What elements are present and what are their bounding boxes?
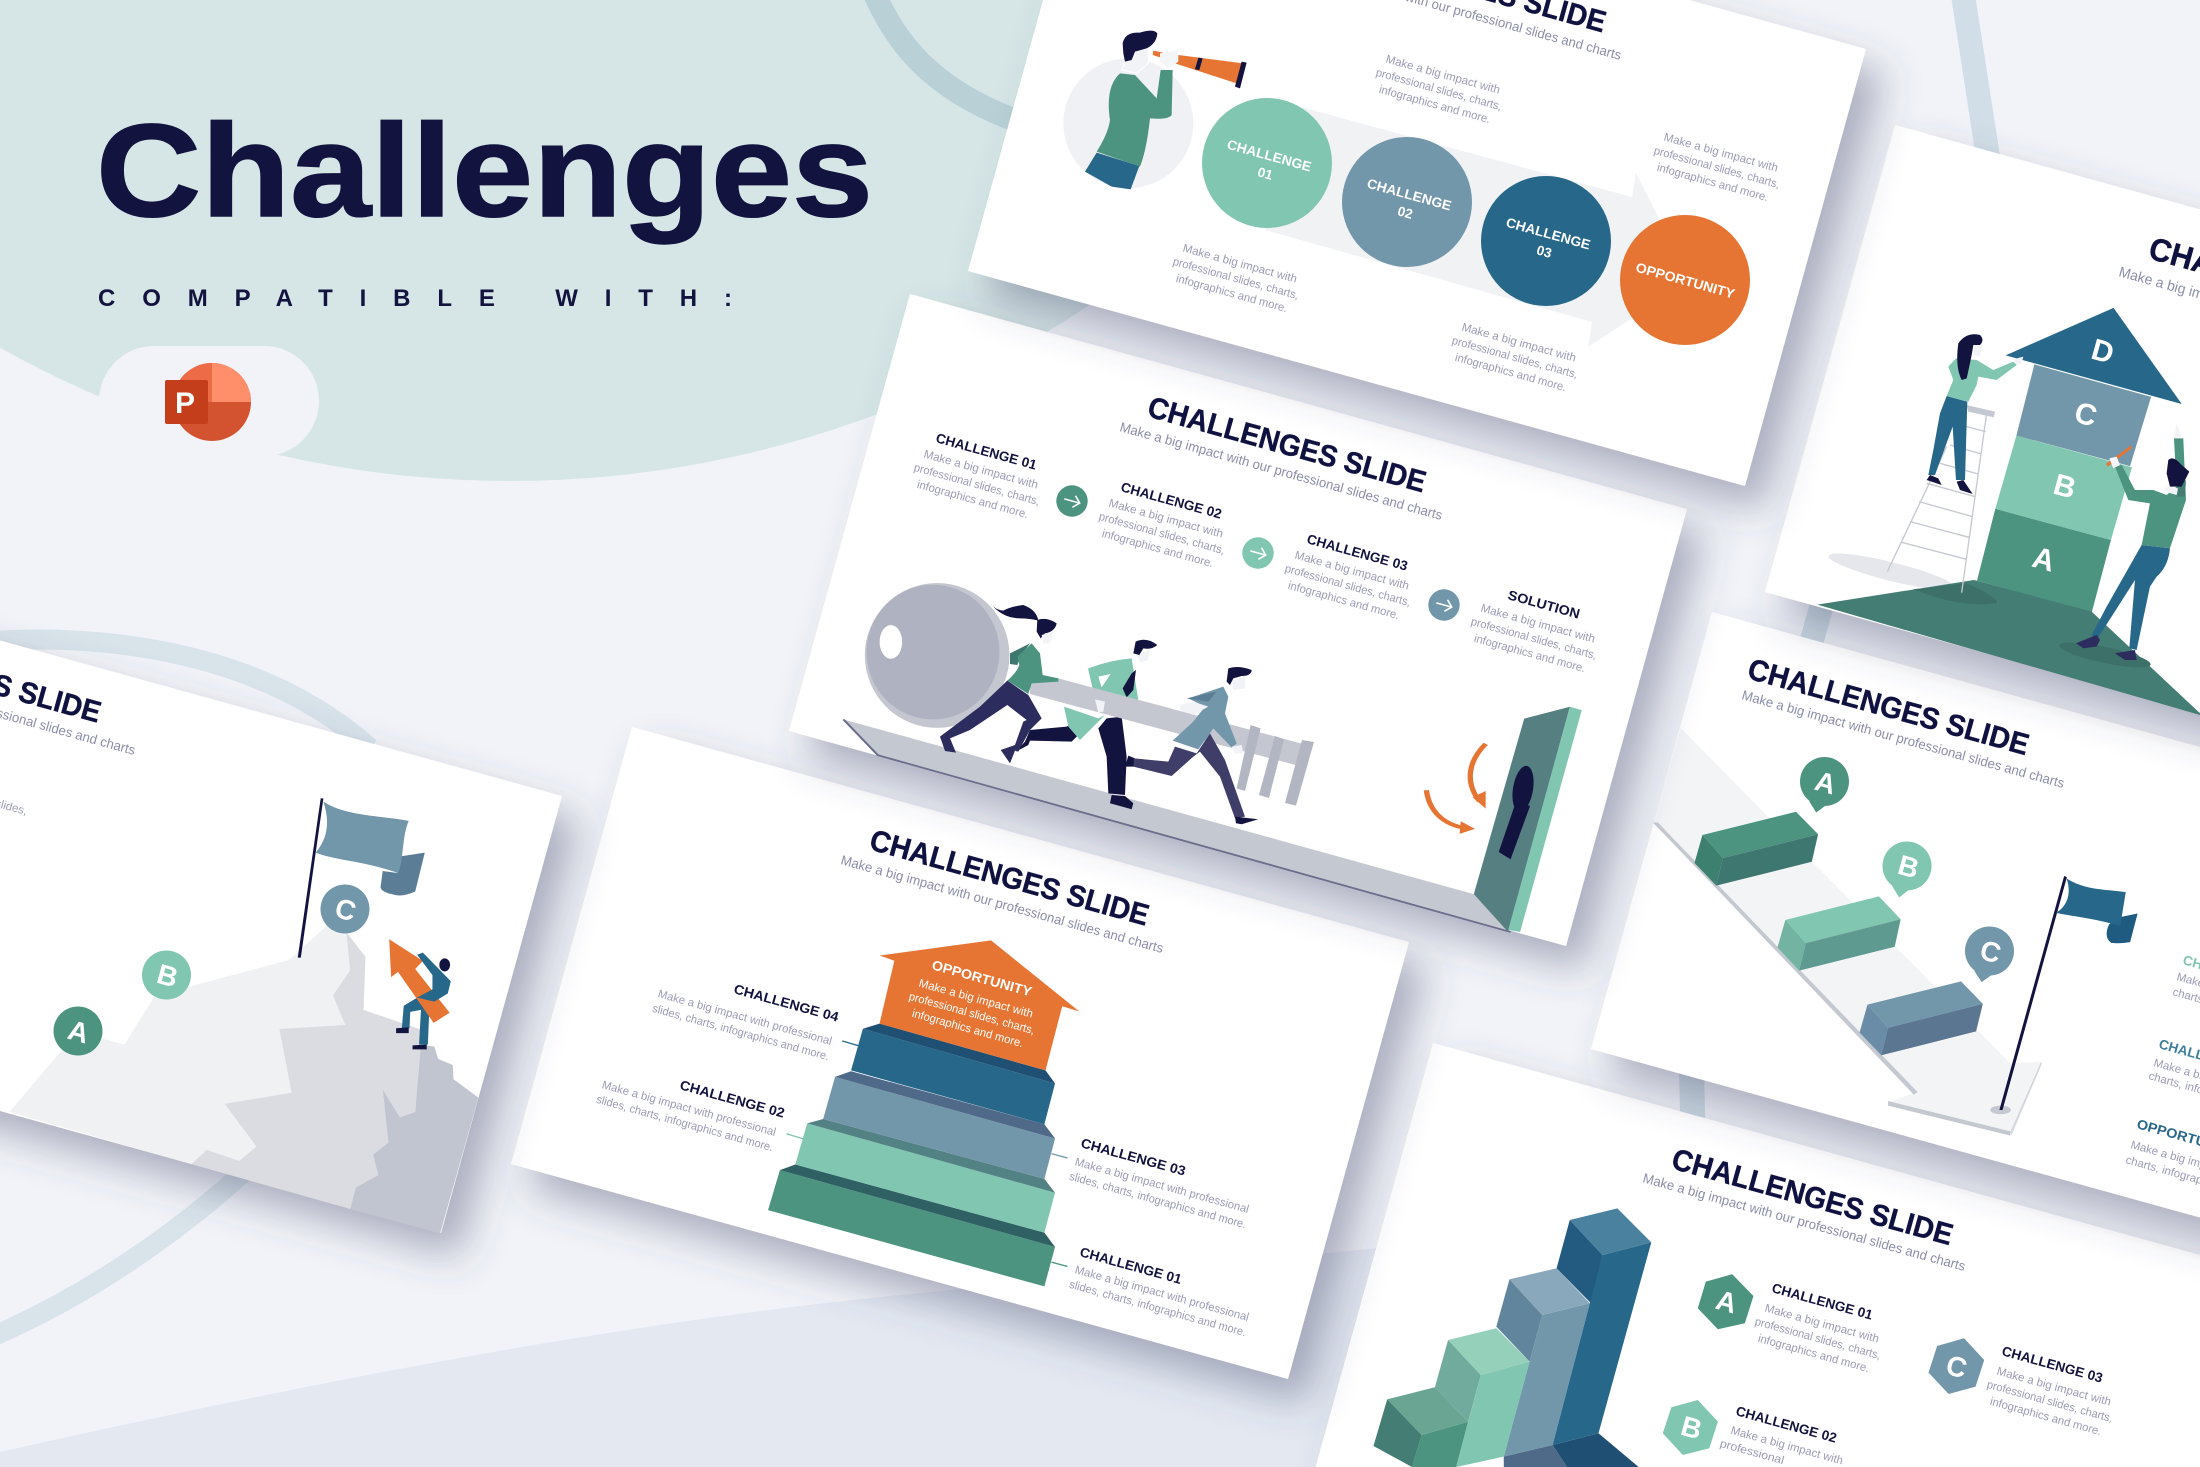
step: challenge 01: CHALLENGE 01 <box>934 430 1039 473</box>
step: solution: SOLUTION <box>1506 587 1582 622</box>
circle: challenge 01: 01 <box>1256 164 1275 183</box>
circle: challenge 01 <box>1202 98 1332 228</box>
circle: challenge 03: CHALLENGE <box>1504 215 1592 252</box>
illustration: floor <box>843 719 1511 932</box>
body text top: Make a big impact with <box>1384 54 1501 97</box>
pin B: B <box>1895 849 1922 884</box>
label: challenge 01: infographics and more. <box>1757 1333 1871 1375</box>
slide: mountain climb <box>0 581 562 1234</box>
step: challenge 01 <box>908 430 1045 523</box>
badge B: B <box>154 958 181 993</box>
label: challenge 02: CHALLENGE 02 <box>678 1077 786 1121</box>
label: challenge 01 <box>1068 1244 1252 1339</box>
chart: stepped pyramid <box>768 940 1079 1286</box>
step: solution: infographics and more. <box>1473 633 1587 675</box>
label: opportunity <box>903 957 1040 1052</box>
label: challenge 03: professional slides, charts, <box>1985 1379 2114 1425</box>
body text lower middle: Make a big impact with <box>1460 322 1577 365</box>
panel background <box>1591 612 2200 1264</box>
subheading: Make a big impact with our professional slides and charts <box>1641 1170 1967 1274</box>
arrows: orange rotation <box>1426 744 1486 834</box>
step: challenge 02: CHALLENGE 02 <box>1119 479 1223 522</box>
slide: steps and flag <box>1591 612 2200 1264</box>
label: challenge 03: Make a big impact with <box>1995 1366 2112 1409</box>
arrow: step 3 to solution <box>1425 586 1463 624</box>
background: teal ring <box>875 0 1020 122</box>
step: challenge 02: infographics and more. <box>1101 528 1215 570</box>
background: lower band <box>0 1248 1378 1467</box>
ground and shadows <box>1817 547 2200 715</box>
illustration: house blocks <box>1977 308 2182 612</box>
step: challenge 03 <box>1279 531 1416 624</box>
label: challenge 01: Make a big impact with <box>1763 1303 1880 1346</box>
label: opportunity: OPPORTUNITY <box>930 957 1033 999</box>
pin C <box>1965 926 2014 982</box>
step: solution: Make a big impact with <box>1479 603 1596 646</box>
body text right: infographics and more. <box>1656 162 1770 204</box>
illustration: man with telescope <box>1063 31 1247 189</box>
body text top <box>1370 52 1507 128</box>
heading: CHALLENGES SLIDE <box>866 824 1153 933</box>
background: ring mid right <box>1812 590 1826 640</box>
letter B: B <box>2050 468 2079 506</box>
label: challenge 03: CHALLENGE 03 <box>2000 1343 2105 1386</box>
subheading: Make a big impact with our professional slides and charts <box>1118 419 1444 523</box>
step: challenge 01: Make a big impact with <box>922 449 1039 492</box>
badge A: A <box>65 1014 92 1049</box>
label: challenge 03: Make a big impact with professional <box>1073 1156 1250 1216</box>
label: opportunity: Make a big impact with <box>917 978 1034 1021</box>
step: challenge 03: professional slides, charts, <box>1283 563 1412 609</box>
background: teal circle <box>0 0 1552 481</box>
step: challenge 02 <box>1093 479 1230 572</box>
slide: building blocks house <box>1765 125 2200 822</box>
slide: key to the lock <box>789 294 1687 946</box>
label: challenge 02: slides, charts, infographics and more. <box>595 1094 774 1154</box>
panel background <box>968 0 1866 486</box>
illustration: ladder and woman <box>1887 334 2023 593</box>
body text right: Make a big impact with <box>1662 132 1779 175</box>
panel background <box>0 581 562 1233</box>
circle: opportunity <box>1620 215 1750 345</box>
arrow: step 1 to 2 <box>1053 482 1091 520</box>
panel background <box>1316 1043 2200 1467</box>
circle: challenge 02 <box>1342 137 1472 267</box>
step: challenge 03: Make a big impact with <box>1293 550 1410 593</box>
letter A: A <box>2029 541 2058 579</box>
body text lower middle: infographics and more. <box>1454 352 1568 394</box>
body text right: professional slides, charts, <box>1652 145 1781 191</box>
circle: challenge 03 <box>1481 176 1611 306</box>
label: challenge 02: Make a big impact with <box>1729 1425 1844 1467</box>
body text lower left: professional slides, charts, <box>1171 256 1300 302</box>
badge B <box>1663 1400 1718 1455</box>
badge A <box>54 1006 102 1056</box>
icon: PowerPoint logo <box>165 363 251 441</box>
background arrow <box>1265 107 1690 347</box>
badge A: A <box>1713 1284 1740 1319</box>
panel background <box>789 294 1687 946</box>
badge C: C <box>332 892 359 927</box>
background: ring top right <box>1963 0 1990 170</box>
label: opportunity: infographics and more. <box>911 1008 1025 1050</box>
label: challenge 04: slides, charts, infographics and more. <box>651 1003 830 1063</box>
illustration: man holding tool <box>2076 423 2189 660</box>
subheading: Make a big impact with our professional slides and charts <box>1740 687 2066 791</box>
label: challenge 01: Make a big impact with professional <box>1073 1264 1250 1324</box>
panel background <box>511 727 1409 1379</box>
circle: challenge 01: CHALLENGE <box>1225 137 1313 174</box>
illustration: keyhole door <box>1474 707 1582 932</box>
label: challenge 03: infographics and more. <box>1989 1396 2103 1438</box>
circle: challenge 03: 03 <box>1535 242 1554 261</box>
subtitle: compatible with: COMPATIBLE WITH: <box>98 285 732 312</box>
badge A <box>1698 1274 1753 1329</box>
arrow: step 2 to 3 <box>1239 534 1277 572</box>
label: challenge 02: Make a big impact with professional <box>600 1079 777 1139</box>
title: Challenges <box>96 97 873 244</box>
chart: isometric bars <box>1373 1208 1651 1467</box>
body text lower left <box>1167 241 1304 317</box>
label: opportunity: professional slides, charts, <box>907 991 1036 1037</box>
illustration: man carrying arrow <box>389 939 451 1049</box>
badge B <box>142 950 191 1000</box>
label: challenge 01: CHALLENGE 01 <box>1770 1280 1875 1323</box>
right column labels, cut off at page edge <box>2124 952 2200 1193</box>
PowerPoint pill <box>99 346 319 455</box>
circle: opportunity: OPPORTUNITY <box>1634 260 1736 301</box>
illustration: mountain <box>10 925 478 1234</box>
label: challenge 03 <box>1068 1135 1252 1231</box>
flag <box>1990 876 2138 1114</box>
step: challenge 03: infographics and more. <box>1287 580 1401 622</box>
slide: bar chart slide bottom right <box>1316 1043 2200 1467</box>
pin A <box>1800 757 1849 812</box>
background: ring lower right <box>1691 1050 1693 1130</box>
label: challenge 01: professional slides, charts, <box>1753 1316 1882 1362</box>
label: challenge 04: Make a big impact with professional <box>656 988 833 1048</box>
body text lower left: infographics and more. <box>1175 273 1289 315</box>
step: challenge 01: infographics and more. <box>916 479 1030 521</box>
badge C <box>320 884 370 934</box>
label: challenge 03: slides, charts, infographics and more. <box>1068 1171 1247 1231</box>
label: challenge 01 <box>1749 1280 1886 1377</box>
background: ring left bottom <box>0 1165 252 1342</box>
badge C: C <box>1943 1349 1970 1384</box>
illustration: three runners carrying key <box>940 603 1314 824</box>
badge C <box>1929 1338 1984 1394</box>
body text lower middle: professional slides, charts, <box>1450 335 1579 381</box>
label: challenge 02: CHALLENGE 02 <box>1734 1403 1838 1446</box>
label: challenge 02: professional <box>1718 1438 1785 1467</box>
pin C: C <box>1977 934 2004 969</box>
panel background <box>1765 125 2200 822</box>
label: challenge 01: slides, charts, infographics and more. <box>1068 1279 1247 1339</box>
body text right <box>1648 130 1785 206</box>
label: challenge 03: CHALLENGE 03 <box>1079 1135 1188 1179</box>
slide: telescope and circles <box>968 0 1866 486</box>
label: challenge 04: CHALLENGE 04 <box>732 981 841 1025</box>
subheading: Make a big impact with our professional slides and charts <box>839 852 1165 956</box>
slide: pyramid stairs <box>511 727 1409 1379</box>
letter C: C <box>2071 396 2100 434</box>
circle: challenge 02: 02 <box>1396 203 1414 222</box>
step: solution: professional slides, charts, <box>1469 616 1598 662</box>
flag <box>298 798 425 958</box>
body text lower middle <box>1446 320 1583 396</box>
step: solution <box>1465 587 1602 677</box>
illustration: key head <box>865 583 1009 728</box>
step: challenge 02: Make a big impact with <box>1107 498 1224 541</box>
icon: PowerPoint logo: P <box>175 387 195 420</box>
body text top: professional slides, charts, <box>1374 67 1503 113</box>
illustration: descending steps <box>1653 728 2042 1136</box>
step: challenge 01: professional slides, charts, <box>912 462 1041 508</box>
body text lower left: Make a big impact with <box>1181 243 1298 286</box>
body text top: infographics and more. <box>1378 84 1492 126</box>
badge B: B <box>1678 1410 1705 1445</box>
heading: CHALLENGES SLIDE <box>1668 1143 1956 1252</box>
pin B <box>1882 842 1932 897</box>
step: challenge 03: CHALLENGE 03 <box>1305 531 1410 574</box>
label: challenge 02 <box>1718 1403 1844 1467</box>
circle: challenge 02: CHALLENGE <box>1365 176 1453 213</box>
letter D: D <box>2088 333 2117 371</box>
step: challenge 02: professional slides, charts, <box>1097 511 1226 557</box>
pin A: A <box>1812 765 1839 800</box>
label: challenge 03 <box>1981 1343 2118 1440</box>
heading: CHALLENGES SLIDE <box>1744 653 2032 762</box>
label: challenge 01: CHALLENGE 01 <box>1078 1244 1184 1287</box>
background: ring left top <box>0 640 370 748</box>
heading: CHALLENGES SLIDE <box>1144 391 1430 499</box>
